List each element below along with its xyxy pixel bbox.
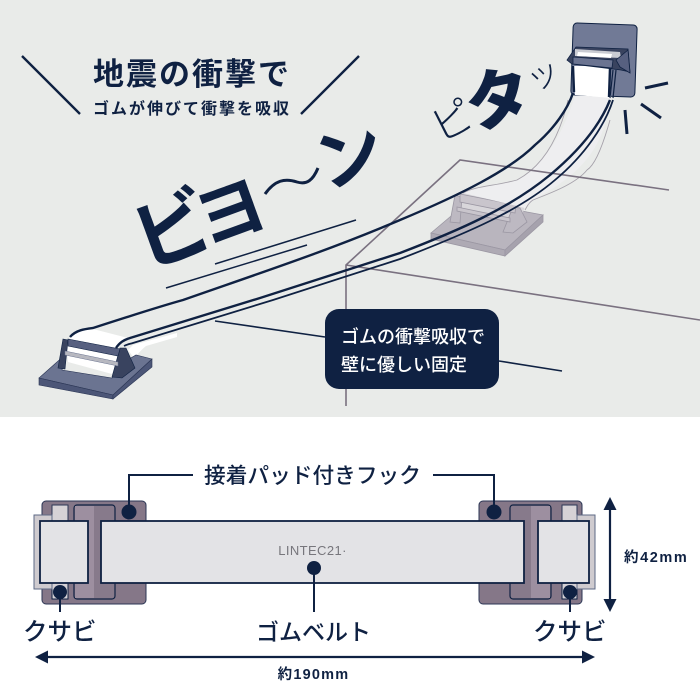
rubber belt: LINTEC21· — [278, 543, 347, 558]
height dimension — [604, 497, 688, 612]
label: rubber belt — [256, 561, 371, 645]
title — [22, 56, 359, 118]
rubber belt — [101, 521, 524, 583]
sound effect: byoon: ビ — [121, 176, 224, 285]
floor hook — [39, 339, 152, 399]
ghost hook: resting position — [431, 190, 543, 256]
sound effect: pita: ッ — [520, 51, 567, 99]
wall hook — [567, 23, 637, 98]
sound effect: byoon — [121, 109, 395, 285]
label: adhesive pad hook: 接着パッド付きフック — [204, 463, 421, 488]
panel: earthquake scene — [0, 0, 700, 417]
room outline — [346, 160, 700, 406]
ghost belt — [463, 95, 610, 208]
label: rubber belt: ゴムベルト — [256, 619, 371, 645]
sound effect: byoon: ヨ — [185, 164, 277, 261]
label: wedge right: クサビ — [533, 618, 606, 646]
impact lines — [625, 83, 668, 134]
left hook — [34, 501, 146, 604]
title: ゴムが伸びて衝撃を吸収 — [93, 99, 291, 118]
title: 地震の衝撃で — [93, 57, 291, 92]
panel: product diagram — [23, 463, 688, 683]
callout: 壁に優しい固定 — [341, 355, 467, 375]
sound effect: byoon: ン — [305, 109, 395, 204]
right hook — [479, 501, 595, 604]
label: adhesive pad hook — [122, 463, 502, 520]
sound effect: pita: ピ — [423, 91, 482, 152]
callout — [215, 309, 562, 389]
sound effect: pita — [423, 51, 567, 152]
width dimension: 約190mm — [278, 666, 349, 683]
rubber belt stretched — [70, 93, 613, 348]
callout: ゴムの衝撃吸収で — [341, 326, 485, 347]
label: wedge right — [533, 585, 606, 646]
sound effect: pita: タ — [459, 58, 538, 142]
speed lines — [166, 220, 356, 288]
label: wedge left: クサビ — [23, 618, 96, 646]
width dimension — [35, 650, 595, 683]
height dimension: 約42mm — [624, 549, 688, 566]
floor belt white section — [66, 329, 177, 374]
label: wedge left — [23, 585, 96, 646]
